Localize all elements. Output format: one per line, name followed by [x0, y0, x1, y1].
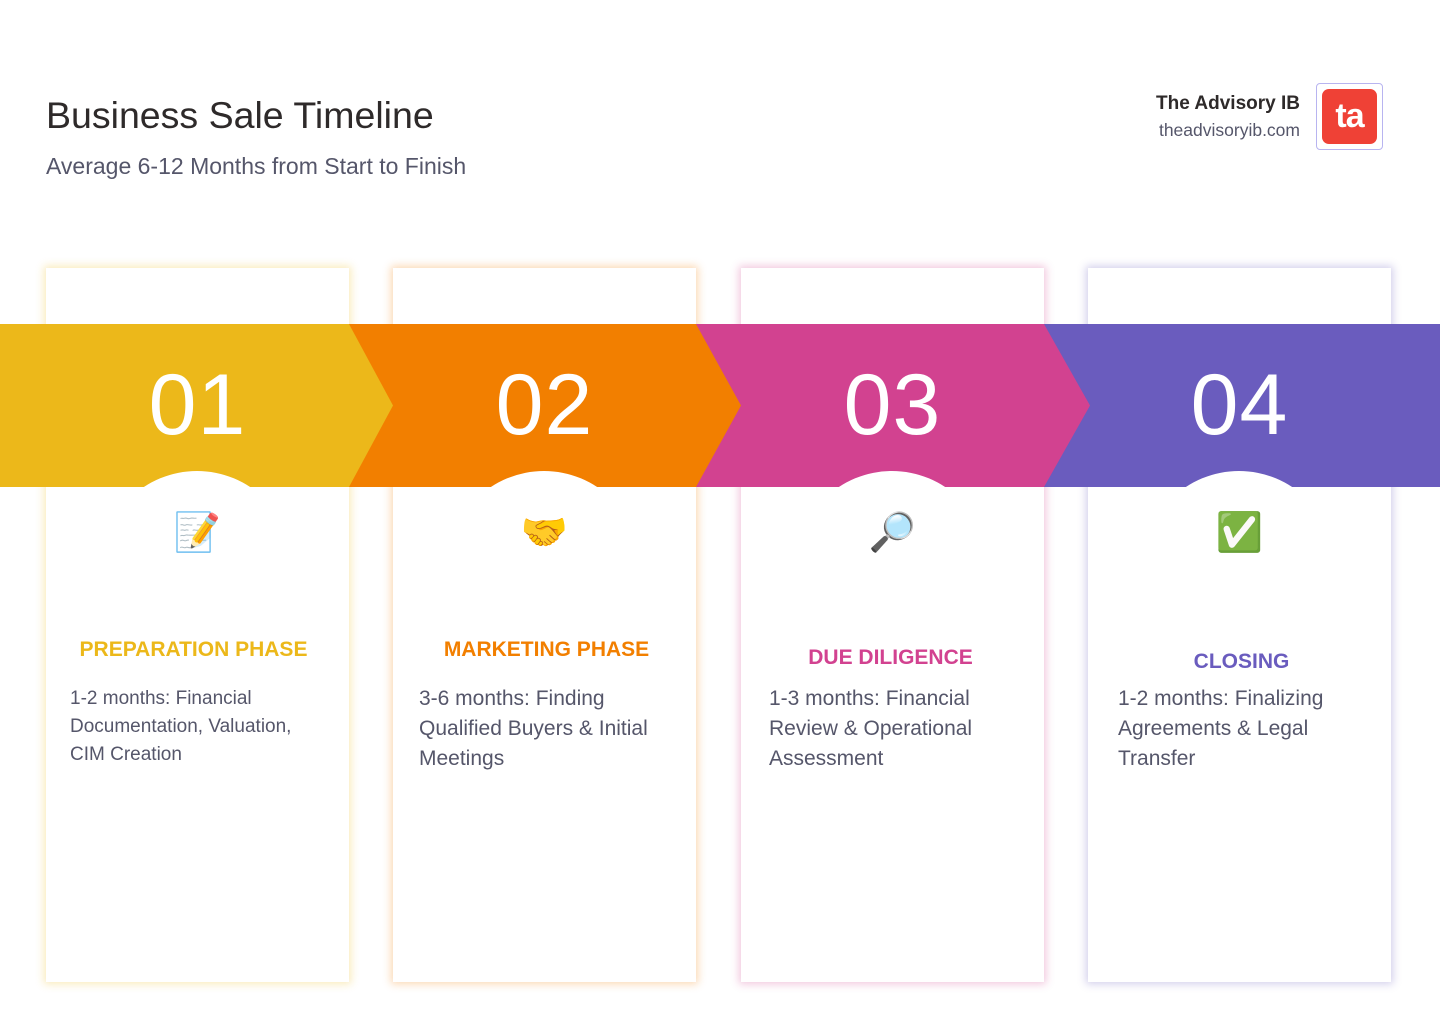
body 2: Meetings — [419, 747, 504, 770]
heading 4: CLOSING — [1194, 650, 1289, 673]
logo — [1316, 83, 1383, 150]
circles — [101, 471, 293, 663]
card 3 — [741, 268, 1044, 982]
body 1: 1-2 months: Financial — [70, 688, 252, 709]
body 2: 3-6 months: Finding — [419, 687, 605, 710]
text: 02 — [496, 357, 593, 453]
card 2 — [393, 268, 696, 982]
card 1 — [46, 268, 349, 982]
icon: memo: 📝 — [174, 512, 221, 554]
body 4: Transfer — [1118, 747, 1195, 770]
numbers: 01 — [149, 357, 246, 453]
brand text — [1156, 93, 1300, 140]
body 4 — [1118, 687, 1323, 770]
text: 04 — [1191, 357, 1288, 453]
body 2 — [419, 687, 648, 770]
body 3: Review & Operational — [769, 717, 972, 740]
icon: check: ✅ — [1216, 512, 1263, 554]
arrow band — [0, 324, 1440, 487]
body 3: Assessment — [769, 747, 883, 770]
body 4: Agreements & Legal — [1118, 717, 1308, 740]
brand text: The Advisory IB — [1156, 93, 1300, 114]
heading 1: PREPARATION PHASE — [80, 638, 307, 661]
icon: handshake: 🤝 — [521, 512, 568, 554]
heading 3: DUE DILIGENCE — [808, 646, 973, 669]
body 1 — [70, 688, 291, 765]
body 1: Documentation, Valuation, — [70, 716, 291, 737]
body 4: 1-2 months: Finalizing — [1118, 687, 1323, 710]
body 3: 1-3 months: Financial — [769, 687, 970, 710]
text: 03 — [844, 357, 941, 453]
icon: magnifier: 🔎 — [869, 512, 916, 554]
card 4 — [1088, 268, 1391, 982]
body 3 — [769, 687, 972, 770]
brand text: theadvisoryib.com — [1159, 120, 1300, 140]
body 2: Qualified Buyers & Initial — [419, 717, 648, 740]
subtitle: Average 6-12 Months from Start to Finish — [46, 153, 466, 179]
title: Business Sale Timeline — [46, 94, 434, 136]
heading 2: MARKETING PHASE — [444, 638, 649, 661]
body 1: CIM Creation — [70, 744, 182, 765]
logo: ta — [1335, 97, 1364, 135]
